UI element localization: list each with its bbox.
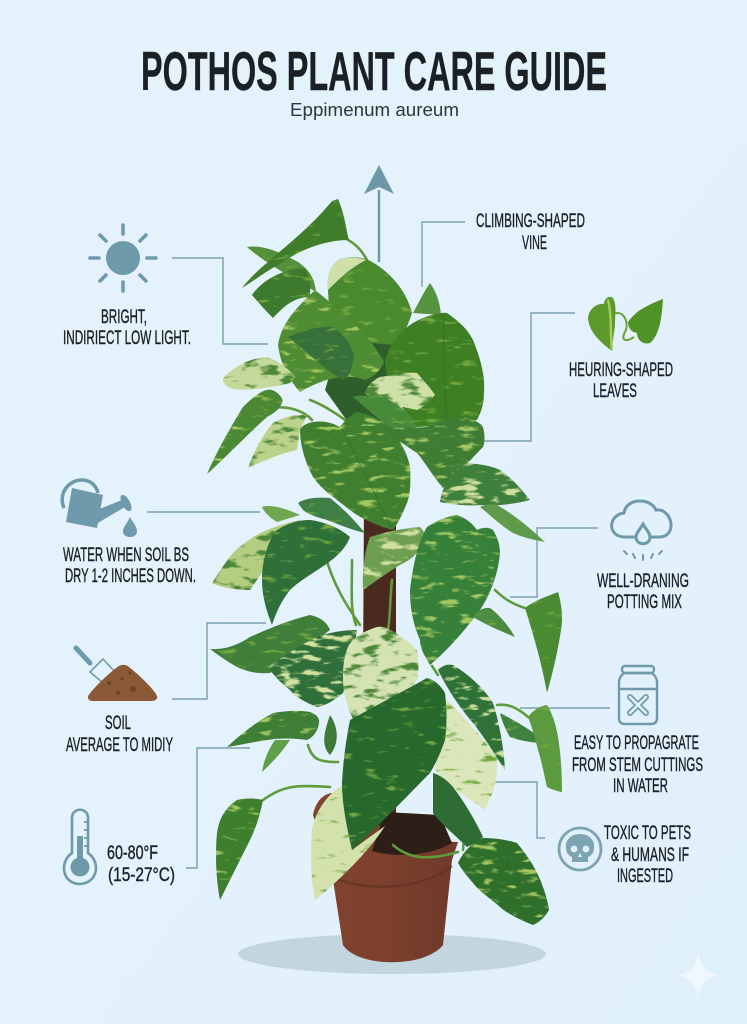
pale right leaf — [435, 700, 497, 810]
leaves label: LEAVES — [593, 381, 637, 402]
pot — [313, 793, 458, 962]
moss pole — [362, 500, 396, 850]
climbing label — [476, 211, 585, 254]
propagation label — [572, 733, 703, 797]
upper foliage — [207, 199, 545, 542]
striped leaf — [438, 665, 505, 770]
leaf — [262, 740, 290, 772]
stems — [263, 240, 528, 857]
leaf — [262, 506, 300, 522]
climbing label: CLIMBING-SHAPED — [476, 211, 585, 232]
icon: skull — [559, 828, 601, 870]
sun block — [63, 225, 191, 349]
leaf — [278, 290, 384, 392]
potting mix label: POTTING MIX — [607, 592, 682, 613]
temperature label — [107, 843, 175, 886]
leaf — [363, 527, 425, 590]
icon: heart leaves — [588, 297, 663, 351]
main heart leaf — [300, 412, 410, 530]
leaf — [328, 257, 412, 357]
light label — [63, 307, 191, 349]
soil label: AVERAGE TO MIDIY — [66, 735, 173, 756]
pale variegated leaf — [343, 627, 418, 743]
leaf — [365, 373, 435, 410]
right heart leaf — [383, 417, 484, 488]
leaf — [248, 415, 307, 468]
leaf — [500, 713, 555, 748]
leaf — [410, 515, 500, 665]
leaf — [288, 327, 354, 380]
toxicity label: INGESTED — [617, 866, 673, 887]
leaf — [247, 246, 316, 292]
icon: thermometer — [64, 810, 96, 884]
water block — [62, 480, 196, 587]
bottom right leaf — [458, 838, 549, 925]
icon: watering can — [62, 480, 137, 537]
dark center mass — [325, 340, 400, 425]
leaves label: HEURING-SHAPED — [569, 360, 673, 381]
icon: rain cloud — [612, 501, 671, 560]
soil block — [66, 648, 173, 756]
lower foliage — [216, 627, 562, 925]
icon: trowel and soil — [76, 648, 157, 701]
leaf — [242, 199, 349, 288]
toxicity label: & HUMANS IF — [611, 845, 689, 866]
middle foliage — [210, 498, 562, 772]
light label: BRIGHT, — [101, 307, 147, 328]
subtitle: Eppimenum aureum — [290, 100, 459, 120]
dark low leaf — [433, 773, 483, 847]
water label: DRY 1-2 INCHES DOWN. — [65, 566, 196, 587]
leaf — [413, 283, 441, 315]
leaf — [324, 715, 337, 755]
leaf — [212, 520, 300, 590]
icon: sun — [90, 225, 156, 291]
leaf — [207, 390, 283, 474]
water label: WATER WHEN SOIL BS — [63, 545, 189, 566]
leaves block — [569, 297, 673, 402]
potting mix block — [597, 501, 689, 613]
connector lines — [147, 222, 610, 868]
leaf — [210, 615, 330, 673]
light label: INDIRIECT LOW LIGHT. — [63, 328, 191, 349]
propagation label: IN WATER — [613, 776, 668, 797]
leaves label — [569, 360, 673, 402]
climbing label: VINE — [522, 233, 547, 254]
sparkle watermark — [677, 953, 719, 997]
leaf — [298, 498, 365, 533]
big dark leaf — [342, 678, 446, 850]
propagation block — [572, 666, 703, 797]
growth arrow — [364, 165, 394, 262]
right small leaf — [528, 705, 562, 792]
leaf — [440, 463, 530, 505]
leaf — [252, 268, 310, 318]
leaf — [473, 608, 515, 637]
temperature label: 60-80°F — [107, 843, 158, 864]
leaf — [227, 711, 319, 747]
potting mix label: WELL-DRANING — [597, 571, 689, 592]
water label — [63, 545, 196, 587]
potting mix label — [597, 571, 689, 613]
leaf — [223, 357, 295, 390]
bottom left dangling leaf — [216, 798, 263, 900]
leaf — [262, 520, 350, 625]
toxicity label — [604, 823, 691, 887]
temperature block — [64, 810, 175, 886]
dangling leaf — [525, 592, 562, 693]
pale bottom leaf — [311, 785, 385, 900]
icon: jar — [619, 666, 657, 724]
plant illustration — [207, 199, 562, 962]
leaf — [480, 504, 545, 542]
leaf — [353, 395, 417, 432]
temperature label: (15-27°C) — [108, 865, 175, 886]
toxicity label: TOXIC TO PETS — [604, 823, 691, 844]
soil label — [66, 713, 173, 756]
leaf — [268, 630, 357, 707]
toxicity block — [559, 823, 691, 887]
shadow under pot — [238, 934, 546, 974]
leaf — [385, 313, 484, 427]
soil label: SOIL — [105, 713, 131, 734]
